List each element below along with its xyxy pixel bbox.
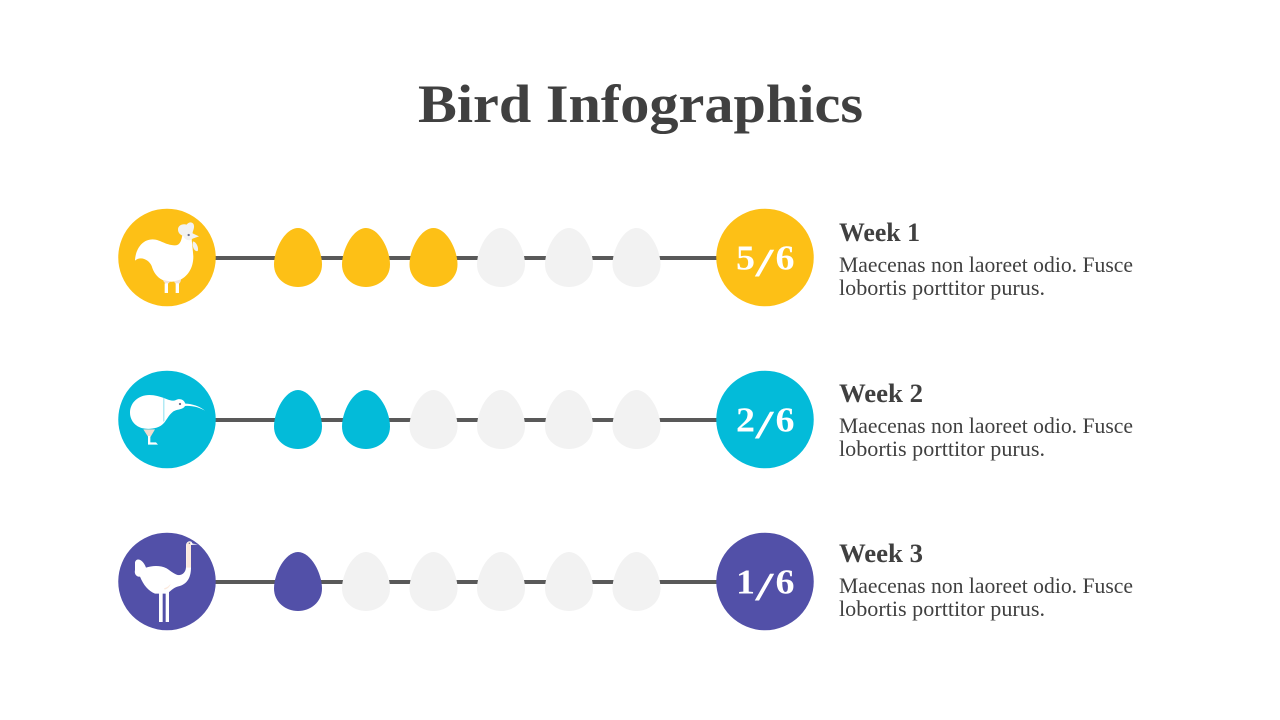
score badge: 2/6: 2 bbox=[736, 400, 755, 440]
score badge: 5/6 bbox=[716, 209, 814, 306]
row: week 2 bbox=[118, 371, 1133, 468]
title: Bird Infographics bbox=[418, 74, 863, 134]
eggs: 1 of 6 filled bbox=[274, 552, 660, 611]
score badge: 1/6: 1 bbox=[736, 562, 755, 602]
score badge: 2/6: 6 bbox=[776, 400, 794, 440]
week 2 text: Maecenas non laoreet odio. Fusce bbox=[839, 413, 1133, 438]
score badge: 1/6: / bbox=[756, 566, 774, 608]
week 3 text: lobortis porttitor purus. bbox=[839, 596, 1045, 621]
icon: rooster bbox=[118, 209, 216, 306]
week 1 text: Week 1 bbox=[839, 218, 920, 247]
week 3 text: Week 3 bbox=[839, 539, 923, 568]
score badge: 5/6: 6 bbox=[776, 238, 794, 278]
eggs: 3 of 6 filled bbox=[274, 228, 660, 287]
week 2 text: lobortis porttitor purus. bbox=[839, 436, 1045, 461]
row: week 3 bbox=[118, 533, 1133, 630]
week 3 text: Maecenas non laoreet odio. Fusce bbox=[839, 573, 1133, 598]
score badge: 5/6: / bbox=[756, 242, 774, 284]
score badge: 2/6: / bbox=[756, 404, 774, 446]
score badge: 2/6 bbox=[716, 371, 814, 468]
week 1 text bbox=[839, 218, 1133, 300]
icon: ostrich bbox=[118, 533, 216, 630]
eggs: 2 of 6 filled bbox=[274, 390, 660, 449]
row: week 1 bbox=[118, 209, 1133, 306]
score badge: 1/6: 6 bbox=[776, 562, 794, 602]
score badge: 5/6: 5 bbox=[736, 238, 755, 278]
week 1 text: Maecenas non laoreet odio. Fusce bbox=[839, 252, 1133, 277]
week 2 text bbox=[839, 379, 1133, 461]
score badge: 1/6 bbox=[716, 533, 814, 630]
week 1 text: lobortis porttitor purus. bbox=[839, 275, 1045, 300]
week 2 text: Week 2 bbox=[839, 379, 923, 408]
icon: kiwi bbox=[118, 371, 216, 468]
week 3 text bbox=[839, 539, 1133, 621]
